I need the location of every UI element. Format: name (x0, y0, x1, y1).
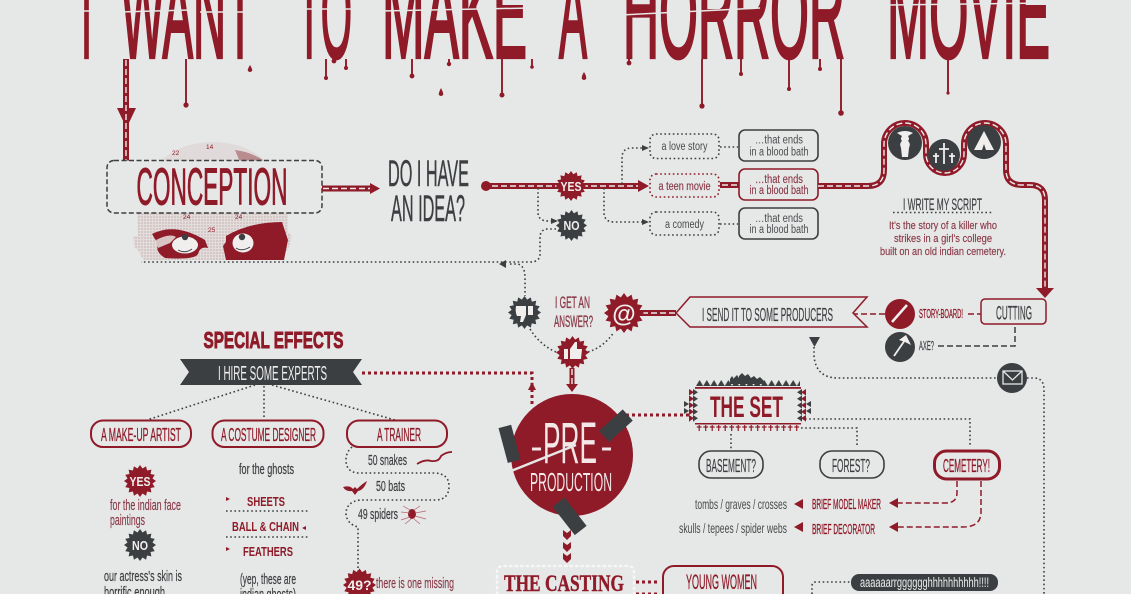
text: I write my script: I WRITE MY SCRIPT (903, 195, 982, 214)
banner: I send it to some producers: I SEND IT TO SOME PRODUCERS (702, 305, 833, 325)
box: basement: BASEMENT? (706, 456, 756, 476)
text: skin is horrific enough (104, 569, 182, 594)
box: young women (663, 566, 783, 594)
arrow: conception to idea (322, 183, 380, 194)
costume list: BALL & CHAIN (232, 519, 299, 534)
badge: thumb up (556, 336, 589, 369)
question: do I have an idea (388, 153, 469, 229)
text: BRIEF MODEL MAKER (812, 496, 881, 513)
box: cemetery: CEMETERY! (943, 456, 990, 476)
trainer path: 49 spiders (358, 507, 398, 523)
box: a teen movie (650, 174, 719, 197)
winding road to cutting (818, 123, 1054, 298)
costume list: (yep, these are (240, 572, 296, 588)
box: ends in blood bath 2 (739, 169, 818, 200)
box: basement (699, 451, 763, 478)
arrow: title to conception (117, 59, 136, 162)
badge: make-up yes: YES (130, 474, 151, 489)
heading: special effects: SPECIAL EFFECTS (204, 327, 344, 353)
pre-production circle: PRODUCTION (530, 467, 612, 497)
badge: 49: 49? (347, 577, 372, 593)
blood drips (183, 59, 950, 116)
box: cemetery (934, 451, 1000, 479)
trainer path (346, 447, 449, 572)
chevrons down (563, 530, 571, 563)
icon: tepee (967, 125, 1001, 159)
badge: make-up no (124, 529, 156, 561)
trainer path: 50 bats (376, 479, 405, 495)
dotted connectors: answer (530, 329, 614, 352)
illustration: staring head: 22 (172, 150, 180, 157)
illustration: staring head: 24 (235, 214, 243, 221)
text: I write my script: built on an old indian cemetery. (880, 246, 1006, 258)
costume list: SHEETS (247, 494, 285, 509)
text: ANSWER? (554, 312, 593, 331)
panel: conception: CONCEPTION (136, 158, 288, 216)
double line: banner to at sign (640, 310, 676, 316)
box: ends in blood bath 1 (739, 130, 818, 161)
box: a trainer: A TRAINER (377, 425, 421, 445)
text: BRIEF DECORATOR (812, 521, 875, 538)
icon: bat (343, 481, 367, 495)
box: a comedy: a comedy (665, 219, 704, 231)
trainer path: 50 snakes (368, 453, 407, 469)
badge: at sign: @ (612, 301, 636, 328)
dotted connectors: set locations (731, 419, 970, 450)
box: ends in blood bath 1: in a blood bath (750, 146, 808, 158)
text: DO I HAVE (388, 153, 469, 194)
dotted red connector: casting to young women (636, 582, 660, 594)
banner: I hire some experts: I HIRE SOME EXPERTS (218, 363, 327, 385)
text: STORY-BOARD! (919, 307, 963, 321)
illustration: staring head: 24 (183, 214, 191, 221)
text: for the indian face paintings: for the indian face (110, 498, 181, 514)
illustration: staring head: 25 (208, 227, 216, 234)
box: forest: FOREST? (832, 456, 870, 476)
pre-production circle: PRE (543, 411, 597, 476)
dashed arrows: cemetery briefs (794, 481, 981, 532)
costume list: FEATHERS (243, 544, 293, 559)
text: for the indian face paintings (110, 498, 181, 529)
icon: spider (401, 506, 426, 524)
text: I write my script (880, 195, 1006, 258)
dotted connectors: experts (147, 385, 395, 420)
scream pill (812, 574, 998, 594)
illustration: staring head: 14 (206, 144, 214, 151)
costume list: for the ghosts (239, 462, 294, 478)
badge: thumb down (508, 296, 541, 329)
icon: girl (888, 126, 922, 160)
banner: I hire some experts (180, 359, 362, 385)
box: costume designer (212, 420, 324, 447)
box: ends in blood bath 2: in a blood bath (750, 185, 808, 197)
dotted connectors: idea branches (141, 145, 738, 296)
icon: axe (885, 332, 915, 362)
text: AN IDEA? (391, 188, 465, 229)
pre-production circle (499, 394, 633, 535)
arrow: answer to pre-production (566, 368, 578, 392)
badge: make-up yes (124, 465, 156, 497)
box: cutting (981, 299, 1046, 324)
panel: the set (684, 373, 811, 432)
badge: yes: YES (560, 179, 582, 194)
badge: 49 (343, 568, 376, 594)
text: I write my script: strikes in a girl's college (894, 233, 992, 245)
dotted red connector: pre-production to the set (620, 414, 690, 416)
box: ends in blood bath 3: …that ends (755, 213, 803, 225)
box: a love story: a love story (662, 141, 708, 153)
panel: the set: THE SET (710, 391, 783, 424)
text: AXE? (919, 339, 934, 353)
badge: no (556, 210, 587, 241)
connector: teen to blood bath (720, 182, 739, 188)
box: a teen movie: a teen movie (658, 181, 710, 193)
banner: I send it to some producers (676, 297, 867, 327)
text: A COSTUME DESIGNER (221, 425, 316, 445)
box: forest (820, 451, 884, 478)
text: for the indian face paintings: paintings (110, 513, 145, 529)
badge: no: NO (564, 218, 580, 233)
box: ends in blood bath 1: …that ends (755, 134, 803, 146)
text: there is one missing: there is one missing (376, 576, 454, 592)
title (78, 0, 1050, 86)
icon: snake (417, 452, 452, 464)
panel: conception (107, 158, 322, 216)
box: ends in blood bath 2: …that ends (755, 174, 803, 186)
box: cutting: CUTTING (996, 304, 1032, 324)
text: skin is horrific enough: our actress's skin is (104, 569, 182, 585)
dark dotted path: producers to envelope (809, 337, 1044, 594)
box: a trainer (347, 420, 447, 447)
scream pill: aaaaaarrgggggghhhhhhhhhh!!!! (860, 575, 989, 590)
line: idea to yes (481, 180, 649, 192)
box: a comedy (650, 212, 719, 235)
box: ends in blood bath 3 (739, 208, 818, 239)
badge: yes (556, 171, 586, 201)
text: skulls tepees spider webs: skulls / tepees / spider webs (679, 520, 787, 536)
box: make-up artist (91, 420, 191, 447)
icon: crosses (928, 139, 960, 171)
question: I get an answer: I GET AN (555, 293, 590, 312)
text: I write my script: It's the story of a killer who (889, 220, 997, 232)
box: a love story (650, 134, 719, 158)
badge: make-up no: NO (132, 538, 148, 553)
illustration: staring head (133, 142, 292, 260)
box: young women: YOUNG WOMEN (686, 571, 757, 594)
dotted red connector: experts to pre-production (362, 373, 536, 406)
costume list (226, 462, 308, 594)
box: ends in blood bath 3: in a blood bath (750, 224, 808, 236)
question: I get an answer (554, 293, 593, 331)
box: make-up artist: A MAKE-UP ARTIST (101, 425, 181, 445)
icon: envelope (997, 363, 1027, 393)
panel: the casting (497, 566, 634, 594)
icon: pencil storyboard (885, 299, 915, 329)
dashed connectors: cutting (852, 314, 1015, 346)
text: tombs graves crosses: tombs / graves / crosses (695, 496, 787, 512)
badge: at sign (604, 293, 644, 333)
